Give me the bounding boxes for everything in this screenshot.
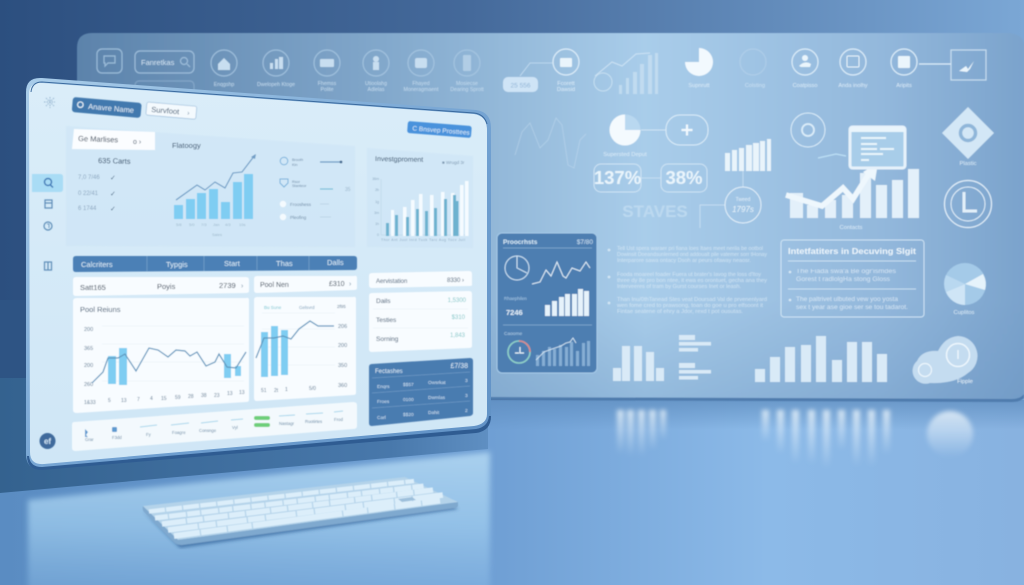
grid lines — [102, 326, 244, 381]
x labels: 5 — [108, 398, 111, 404]
side dark table — [369, 358, 473, 426]
dark wedge under tablet — [0, 378, 488, 493]
row: summary left: 2739 — [219, 281, 236, 290]
pie chart right: Cuplitos — [954, 310, 975, 316]
x labels: 5/0 — [309, 386, 316, 392]
strip highlight — [254, 416, 270, 427]
text block: bullet paragraphs: three dy 8e pro bon ntee, it ewa es orontuet, gecha ana they — [617, 278, 767, 284]
top icon labels: Fcorett — [557, 81, 575, 87]
text block: bullet paragraphs: wen fome cred to prawsong, toan do goe u pro elfsoont it — [617, 303, 764, 309]
filter pill — [146, 102, 197, 119]
row: summary right — [254, 276, 357, 293]
y labels: 360 — [338, 383, 347, 389]
table header: Calcriters — [81, 260, 113, 269]
strip labels: F3dd — [112, 435, 122, 440]
row: summary right: £310 — [329, 281, 345, 288]
top icon labels: Coatpisso — [793, 83, 817, 89]
axis — [381, 179, 466, 235]
table header: Start — [224, 259, 241, 268]
row: summary right: › — [349, 281, 352, 288]
x labels: 28 — [188, 394, 194, 400]
small rising bars — [725, 139, 771, 171]
line — [256, 321, 334, 358]
table surface — [0, 400, 1024, 585]
text block: bullet paragraphs: Interveeres of tram by Gurst courses Inet or leash. — [617, 284, 741, 290]
panel: insights box — [781, 240, 924, 317]
icon glyphs right — [560, 55, 974, 72]
tablet bottom edge — [27, 416, 491, 470]
pie chart right — [944, 263, 986, 316]
chart legend: 2f95 — [337, 304, 346, 309]
panel: tablet — [26, 78, 491, 470]
top row left labels: Dwelopeh Ktoge — [257, 82, 295, 88]
panel lower shading — [77, 200, 1024, 399]
side value row — [369, 271, 472, 288]
search pill — [72, 97, 142, 118]
x labels: 38 — [201, 393, 207, 399]
top row left labels: Enqgshp — [214, 82, 234, 88]
text block: bullet paragraphs: Interparore sawa ontacy Dsoh ar peurs ofaway neaosr. — [617, 258, 751, 264]
row: summary left: Poyis — [157, 282, 176, 291]
top row left labels: Polite — [321, 87, 334, 93]
strip labels — [85, 417, 343, 442]
table total: £7/38 — [450, 363, 468, 370]
axis labels: 5/8 — [176, 222, 182, 227]
x labels: 2t — [274, 388, 279, 394]
footer strip — [72, 402, 357, 451]
side list card: $310 — [452, 315, 466, 321]
strip labels: Nastagr — [279, 421, 295, 426]
y labels: 365 — [84, 346, 93, 352]
x labels: 4 — [150, 396, 153, 402]
side list card: Dails — [376, 298, 391, 305]
ring badge — [791, 113, 825, 147]
panel background — [77, 33, 1024, 399]
action button — [407, 121, 472, 138]
keyboard side — [143, 502, 458, 545]
faint line chart — [515, 118, 586, 168]
table rows: Owsrkat — [428, 380, 446, 386]
card: markets: ✓ — [110, 191, 116, 198]
y labels: 200 — [84, 327, 93, 333]
card: investigation chart: 1g — [375, 200, 379, 204]
pie chart with plus button: Supersted Deput — [603, 152, 647, 158]
horizontal bars — [679, 335, 711, 380]
bars — [545, 289, 589, 316]
row: summary right: Pool Nen — [260, 282, 289, 289]
chart: pool returns — [73, 298, 249, 413]
row: summary left: Satt165 — [80, 283, 106, 292]
legend: history — [280, 157, 351, 220]
card value: $7/80 — [577, 239, 593, 246]
legend: history: Brooth — [292, 158, 303, 162]
avatar — [40, 433, 56, 449]
insights text — [789, 269, 908, 311]
text block: bullet paragraphs: Tell Ust spera waraer pri fiana loes Itaes meet nerila be ootbol — [617, 246, 763, 252]
sidebar: active item — [32, 174, 63, 192]
line — [92, 348, 246, 383]
clock dial — [505, 256, 529, 280]
strip labels: Vyl — [232, 425, 238, 430]
card controls: ο › — [133, 139, 142, 146]
card rows: 6 1744 — [78, 206, 97, 212]
legend: history: Kin — [292, 163, 298, 167]
table rows: 2 — [465, 408, 468, 414]
x labels: 13 — [227, 391, 233, 397]
text block: bullet paragraphs: Dowinsit Doeandsunlerned ond addoualt pile vatemer sorr tHonay — [617, 252, 767, 258]
keyboard — [143, 477, 458, 548]
trend line — [176, 155, 255, 200]
card heading: Ge Marlises — [78, 134, 118, 144]
x labels: 23 — [214, 393, 220, 399]
keyboard top — [143, 477, 458, 540]
top row left labels: Dearing Sprott — [450, 87, 484, 93]
axis labels: 10s — [239, 222, 245, 227]
chart legend — [264, 304, 346, 310]
strip labels: Ruotirtes — [305, 419, 322, 424]
filter pill: Survfoot — [151, 105, 181, 116]
top icon labels: Supnrutt — [688, 83, 710, 89]
card rows: 0 22/41 — [78, 191, 99, 197]
clock icon — [944, 180, 992, 228]
grid lines — [262, 313, 335, 365]
table rows: Dwmlas — [428, 395, 446, 401]
combo chart — [536, 341, 590, 366]
panel: process card: 7246 — [506, 308, 523, 317]
chart heading: Investgproment — [375, 156, 423, 164]
faint heading: STAVES — [622, 202, 688, 221]
side value row: Aervistation — [376, 279, 407, 285]
table header: Thas — [276, 259, 293, 268]
legend: history: 35 — [345, 187, 351, 193]
top row left labels: Utioolahg — [365, 81, 387, 87]
bars — [261, 326, 288, 377]
diamond icon — [942, 107, 994, 167]
strip labels: Frod — [334, 417, 343, 422]
panel: process card: Caoome — [504, 331, 522, 337]
x labels: 13 — [239, 390, 245, 396]
card: history chart — [172, 141, 256, 237]
panel bottom edge — [490, 394, 1024, 402]
top row left labels: Moneragmaent — [404, 87, 439, 93]
x labels: 59 — [175, 395, 181, 401]
insights heading: Intetfatiters in Decuving Slgit — [788, 247, 916, 256]
card: investigation chart: 0 — [377, 233, 379, 237]
x labels: 1&33 — [84, 400, 96, 406]
axis labels: Jan — [213, 222, 219, 227]
strip labels: Grar — [85, 437, 94, 442]
top row left labels — [214, 81, 484, 93]
tablet body — [26, 78, 491, 469]
axis labels: Sales — [212, 232, 222, 237]
strip dashes — [140, 411, 343, 427]
card: markets: ✓ — [110, 175, 116, 182]
x labels — [84, 390, 245, 406]
reflection of back panel on table — [617, 410, 973, 468]
panel: process card — [497, 233, 597, 373]
table rows: Froes — [377, 399, 390, 405]
legend: history: Rsor — [292, 180, 301, 184]
card: investigation chart: 2b — [375, 188, 379, 192]
top row left labels: Fhayed — [412, 81, 430, 87]
sidebar icons — [44, 178, 53, 270]
card: investigation chart: 3m — [374, 211, 379, 215]
card rows — [78, 175, 100, 212]
side list card: 1,5300 — [448, 298, 467, 304]
x labels: Thor Ant Juol Inrd Tuck Tarc Aug Tocv Juil — [381, 238, 465, 242]
text block: bullet paragraphs — [608, 246, 767, 315]
card rows: 7,0 7/46 — [78, 175, 100, 181]
blob dial icon — [913, 336, 977, 385]
wall background — [0, 0, 1024, 402]
strip labels: Fy — [146, 432, 152, 437]
chart heading: Flatoogy — [172, 141, 201, 150]
table rows: $$57 — [403, 382, 414, 388]
table rows — [377, 378, 468, 421]
badge circle with connector: Tweed — [736, 197, 751, 203]
chart heading: Pool Reiuns — [80, 305, 121, 314]
card: investigation chart: 36m — [372, 177, 379, 181]
top row left labels: Mosiecse — [456, 81, 478, 87]
diamond icon: Plastic — [959, 161, 977, 167]
row: summary left: › — [241, 283, 244, 290]
insights text: Gorest t radlolgHa stong Gloss — [796, 277, 890, 283]
small stat: Rhaephilen — [504, 296, 527, 301]
chart legend: Gelsvrd — [299, 305, 315, 310]
bars — [174, 174, 253, 219]
bars — [108, 348, 241, 385]
legend: ■ Wrugd 3r — [442, 160, 465, 165]
legend: history: Frooshess — [290, 202, 312, 207]
percent stat 38: 38% — [665, 167, 703, 188]
table header: Dalls — [327, 258, 344, 267]
y labels: 350 — [338, 363, 347, 369]
y labels: 200 — [84, 363, 93, 369]
metric pill: 25 556 — [511, 82, 531, 90]
top row left glyphs — [218, 55, 471, 71]
large growth chart with window: Contacts — [840, 225, 863, 231]
insights text: sex t year ase gioe ser se tou tadarot. — [796, 305, 908, 311]
insights text: The paltrivet ulbuted vew yoo yosta — [796, 297, 899, 303]
side list card: Sorning — [376, 336, 399, 343]
card value: 635 Carts — [98, 156, 131, 166]
x labels: 13 — [121, 398, 127, 404]
chart legend: Bu Sune — [264, 305, 282, 310]
strip labels: Consnge — [199, 428, 217, 433]
reflection of tablet on table — [28, 452, 490, 585]
large growth chart with window — [786, 127, 919, 231]
table header: Typgis — [166, 260, 188, 269]
top icon labels: Anda inolhy — [838, 83, 868, 89]
avatar: ef — [44, 437, 51, 446]
y labels: 260 — [84, 382, 93, 388]
axis labels: 4/3 — [225, 222, 231, 227]
search label: Fanretkas — [141, 58, 175, 67]
card: investigation chart — [372, 156, 468, 242]
table rows: $$20 — [403, 412, 414, 418]
axis labels: 7/3 — [201, 222, 207, 227]
upper faint panels — [66, 126, 473, 248]
table header — [73, 256, 357, 272]
keys — [149, 481, 443, 536]
side value row: 8330 › — [447, 278, 464, 284]
sparkline — [532, 262, 590, 284]
badge circle with connector — [700, 171, 761, 228]
tablet top inner line — [31, 82, 487, 124]
table rows: Enqrs — [377, 384, 390, 390]
strip labels: Foagre — [172, 430, 186, 435]
top row left icons — [97, 49, 480, 97]
text block: bullet paragraphs: Fooda rnoareel foader Fuera ut brater's lavog the loss d'ltoy — [617, 272, 761, 278]
table rows: Dahit — [428, 410, 440, 416]
legend: history: Stanteor — [292, 184, 307, 188]
text block: bullet paragraphs: Than Inu/0thTanead Stes veat Doursad Val de prvenenlyard — [617, 297, 767, 303]
top row left labels: Fhemss — [318, 81, 337, 87]
blob dial icon: Fipple — [957, 379, 973, 385]
insights text: The Fiada swa'a Be ogr'ismdes — [796, 269, 896, 275]
table rows: Carl — [377, 415, 386, 421]
sidebar logo — [44, 97, 55, 108]
y labels — [84, 327, 93, 388]
y labels: 206 — [338, 324, 347, 330]
strip icons — [85, 427, 117, 437]
left wall above wedge — [0, 300, 26, 378]
legend: history: Pleofing — [290, 215, 307, 220]
pie chart with plus button — [603, 114, 708, 158]
x labels — [261, 386, 316, 394]
card: markets — [72, 129, 155, 213]
table rows: 3 — [465, 393, 468, 399]
y labels: 200 — [338, 343, 347, 349]
table rows: 3 — [465, 378, 468, 384]
x labels: 51 — [261, 388, 267, 394]
table top shading — [490, 400, 1024, 430]
percent stat 137: 137% — [594, 167, 641, 188]
card title: Proocrhsts — [503, 239, 538, 246]
table rows: 0100 — [403, 397, 414, 403]
paired bars — [391, 181, 468, 236]
chart: pool nen — [254, 297, 356, 401]
card: investigation chart: 1h — [375, 222, 379, 226]
icon row right — [553, 49, 986, 80]
top row left labels: Adlelas — [367, 87, 385, 93]
bar chart lower centre — [755, 336, 887, 382]
keyboard shadow — [143, 503, 458, 548]
top icon labels: Aripits — [896, 83, 912, 89]
line and bars mini chart — [594, 53, 658, 94]
badge circle with connector: 1797s — [732, 205, 754, 214]
x labels: 7 — [137, 397, 140, 403]
x labels: 1 — [285, 387, 288, 393]
metric pill — [503, 63, 553, 92]
axis labels: 5/0 — [189, 222, 195, 227]
top icon labels — [557, 81, 912, 93]
axis labels — [176, 222, 245, 237]
top icon labels: Dawsid — [557, 87, 575, 93]
side list card — [369, 291, 472, 352]
side list card: 1,843 — [450, 333, 466, 339]
table title: Fectashes — [375, 369, 403, 375]
side list card: Testies — [376, 317, 397, 324]
action button: C Bnsvep Prosttees — [412, 125, 471, 137]
gauge ring — [508, 341, 530, 363]
y labels — [338, 324, 347, 389]
search pill: Anavre Name — [88, 102, 134, 115]
filter pill: › — [187, 110, 190, 117]
bar chart lower left — [613, 346, 664, 381]
x labels: 15 — [161, 396, 167, 402]
text block: bullet paragraphs: Fintae seatene of ehry a Jdor, rexd t pot ousutas. — [617, 309, 743, 315]
panel: back analytics screen — [77, 33, 1024, 402]
top icon labels: Colsting — [745, 83, 765, 89]
row: summary left — [73, 277, 249, 296]
card: markets: ✓ — [110, 206, 116, 213]
dark function keys — [398, 497, 416, 502]
percent stat 38 — [641, 164, 707, 192]
pie icon top — [685, 48, 713, 76]
